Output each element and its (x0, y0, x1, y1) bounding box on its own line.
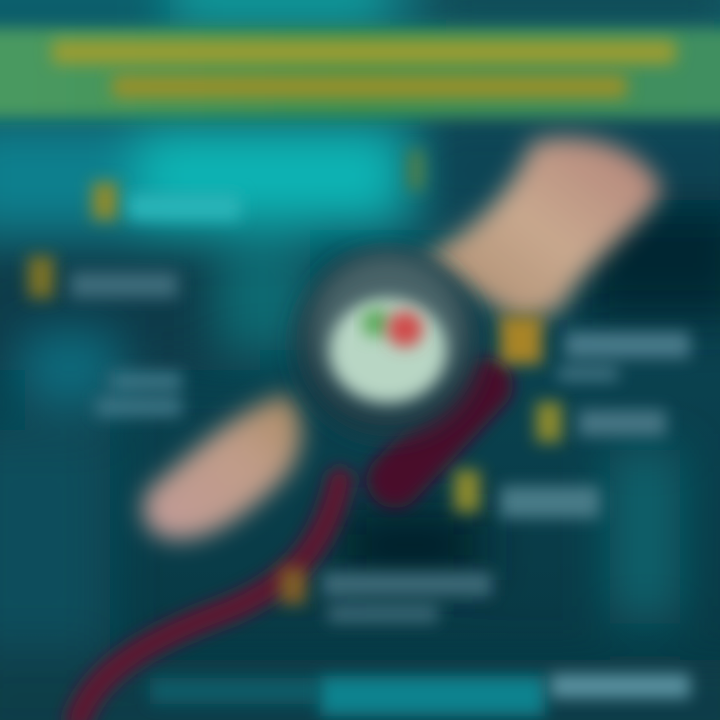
gauge face (330, 298, 446, 402)
green zone (362, 309, 390, 337)
gauge body (296, 253, 480, 437)
text block: right one (558, 332, 690, 380)
red zone (387, 311, 423, 347)
footer label (550, 674, 690, 698)
title line two (112, 75, 627, 98)
gauge (296, 253, 480, 437)
gauge rim (312, 254, 464, 406)
text block: right two (578, 410, 666, 436)
tube (78, 385, 485, 720)
text block: lower centre (322, 572, 492, 622)
forearm and hand (143, 394, 302, 540)
text block: right three (500, 486, 600, 518)
footer bar (150, 674, 690, 716)
title line one (52, 40, 676, 64)
arm upper (420, 137, 662, 322)
title band (0, 28, 720, 118)
text block: left one (70, 272, 178, 298)
text block: left two (96, 372, 182, 416)
yellow markers (28, 150, 562, 604)
text block: top left (128, 194, 240, 220)
